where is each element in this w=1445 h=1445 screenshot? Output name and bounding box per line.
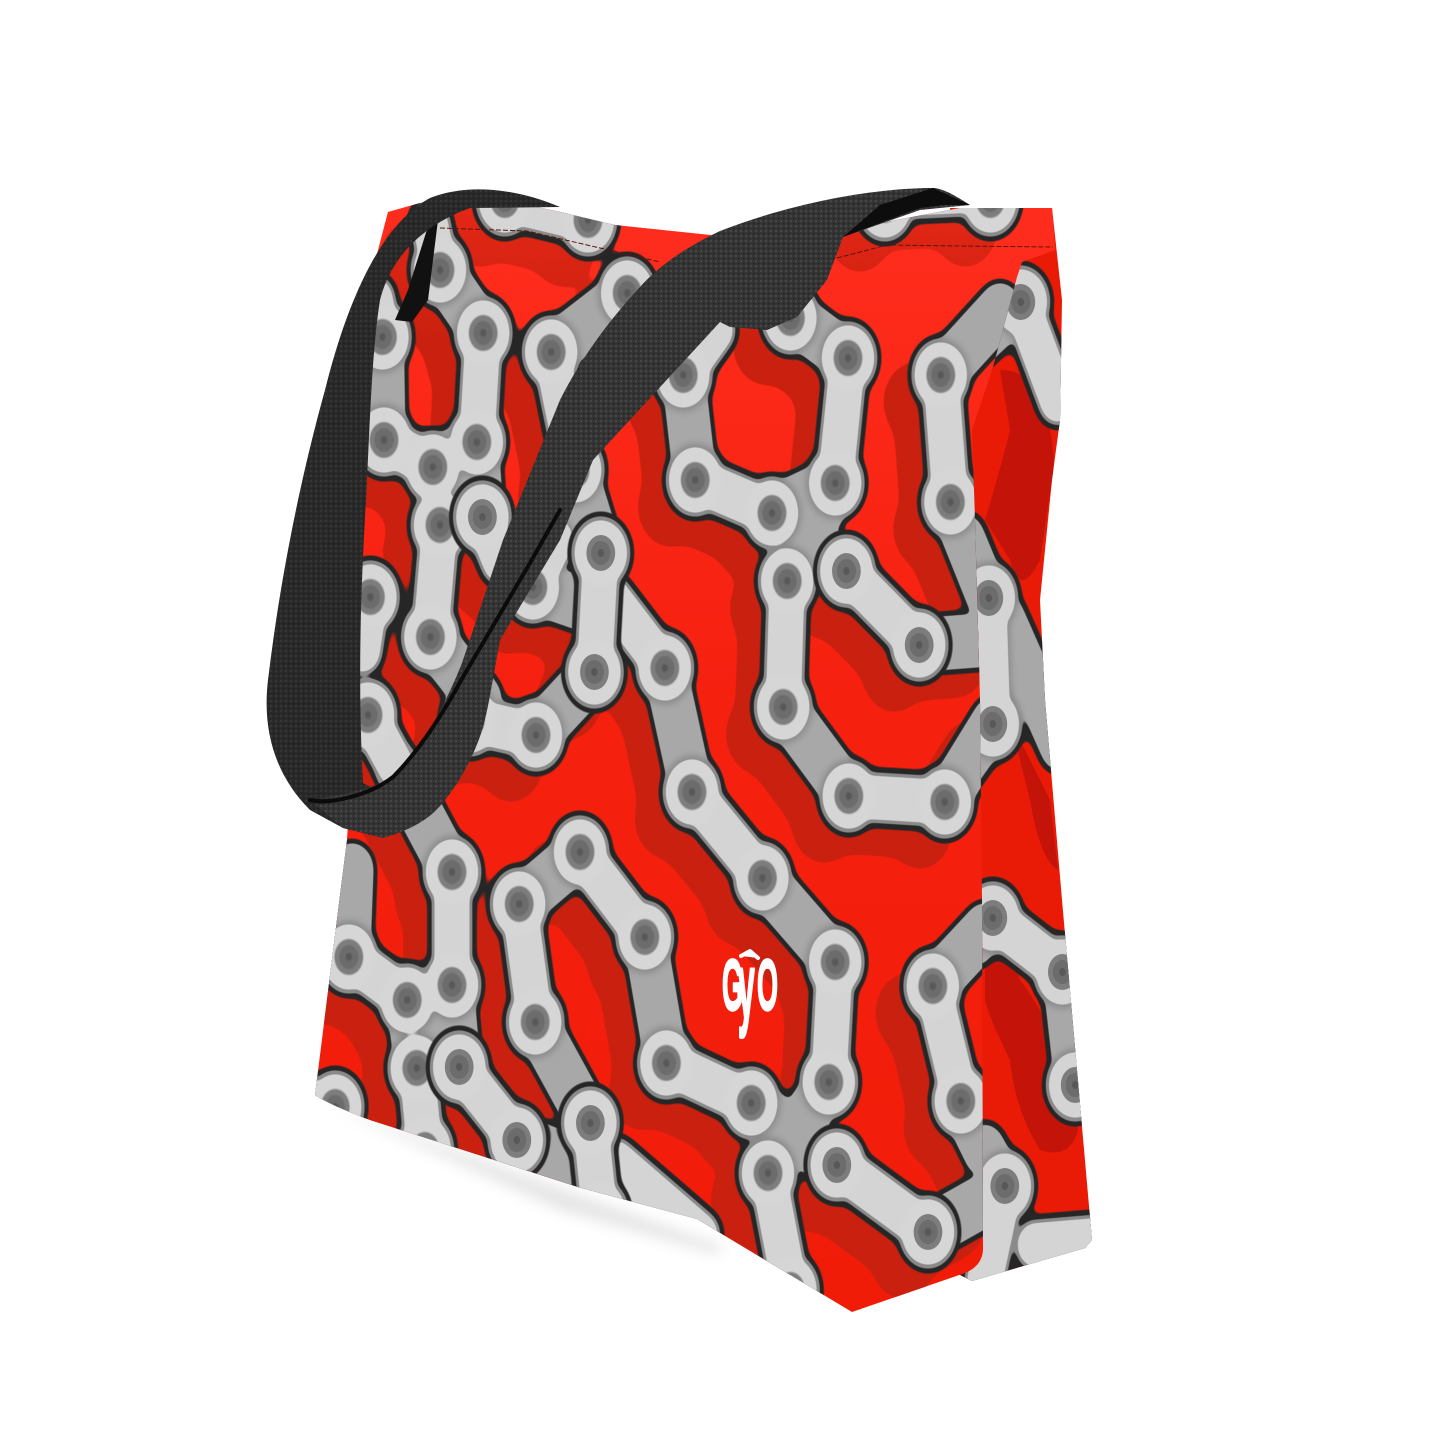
strap front band xyxy=(310,188,970,838)
overlapping top plates xyxy=(459,517,928,1232)
strap crease xyxy=(310,510,560,801)
top stitching xyxy=(440,228,1053,262)
side shadow patches xyxy=(985,370,1078,1152)
chain pins xyxy=(335,200,990,1290)
top highlight over shadow xyxy=(377,202,1052,301)
logo: y xyxy=(738,933,755,1038)
camouflage shadow of chain xyxy=(275,217,975,1317)
side chain links xyxy=(960,302,1095,1280)
chain dark outlines xyxy=(300,190,1000,1290)
chain outer plates xyxy=(300,190,990,1290)
strap black inner tab xyxy=(395,220,438,322)
logo: O xyxy=(757,945,778,1026)
bag front panel xyxy=(275,190,1060,1317)
chain inner plates xyxy=(300,190,1000,1290)
bag side gusset xyxy=(950,208,1095,1281)
logo: G xyxy=(722,945,743,1026)
strap xyxy=(267,188,970,838)
logo xyxy=(722,933,778,1038)
strap dark underside xyxy=(843,188,970,237)
ground shadow xyxy=(330,1105,720,1255)
strap back loop xyxy=(267,189,560,838)
